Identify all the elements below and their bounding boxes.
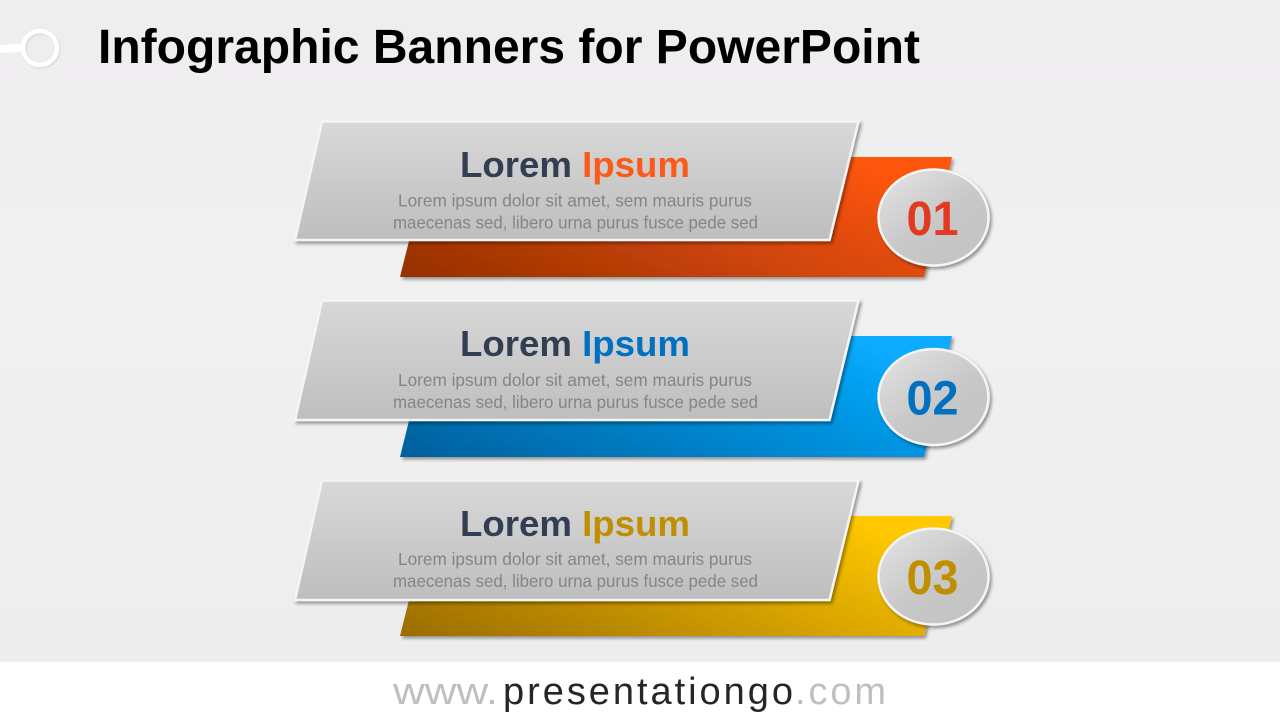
heading 02: Lorem Ipsum xyxy=(460,323,690,364)
footer url xyxy=(392,671,886,713)
number badge 03 xyxy=(878,528,988,624)
grey panel 03 xyxy=(295,480,858,600)
grey panel 01 xyxy=(295,122,858,240)
description 01: Lorem ipsum dolor sit amet, sem mauris purus xyxy=(398,190,752,210)
heading 01: Lorem Ipsum xyxy=(460,144,690,185)
description 02: maecenas sed, libero urna purus fusce pede sed xyxy=(393,392,758,412)
number badge 02 xyxy=(878,349,988,445)
footer url: presentationgo xyxy=(503,671,793,713)
description 02: Lorem ipsum dolor sit amet, sem mauris purus xyxy=(398,370,752,390)
number badge 02: 02 xyxy=(906,372,958,426)
grey panel 02 xyxy=(295,300,858,420)
footer url: www. xyxy=(392,671,498,713)
title: Infographic Banners for PowerPoint xyxy=(98,21,920,74)
number badge 01 xyxy=(878,170,988,266)
description 03 xyxy=(393,549,758,591)
banner 01 xyxy=(295,122,988,277)
footer band xyxy=(0,662,1280,720)
description 01: maecenas sed, libero urna purus fusce pede sed xyxy=(393,212,758,232)
colored ribbon 01 xyxy=(400,157,952,277)
heading 03: Lorem Ipsum xyxy=(460,503,690,544)
colored ribbon 02 xyxy=(400,336,952,457)
description 03: Lorem ipsum dolor sit amet, sem mauris purus xyxy=(398,549,752,569)
banner 02 xyxy=(295,300,988,457)
footer url: .com xyxy=(795,671,886,713)
number badge 03: 03 xyxy=(906,552,958,605)
banner 03 xyxy=(295,480,988,636)
description 01 xyxy=(393,190,758,232)
number badge 01: 01 xyxy=(906,193,958,246)
icon: title ring xyxy=(0,31,57,65)
description 03: maecenas sed, libero urna purus fusce pede sed xyxy=(393,571,758,591)
description 02 xyxy=(393,370,758,412)
colored ribbon 03 xyxy=(400,516,952,636)
